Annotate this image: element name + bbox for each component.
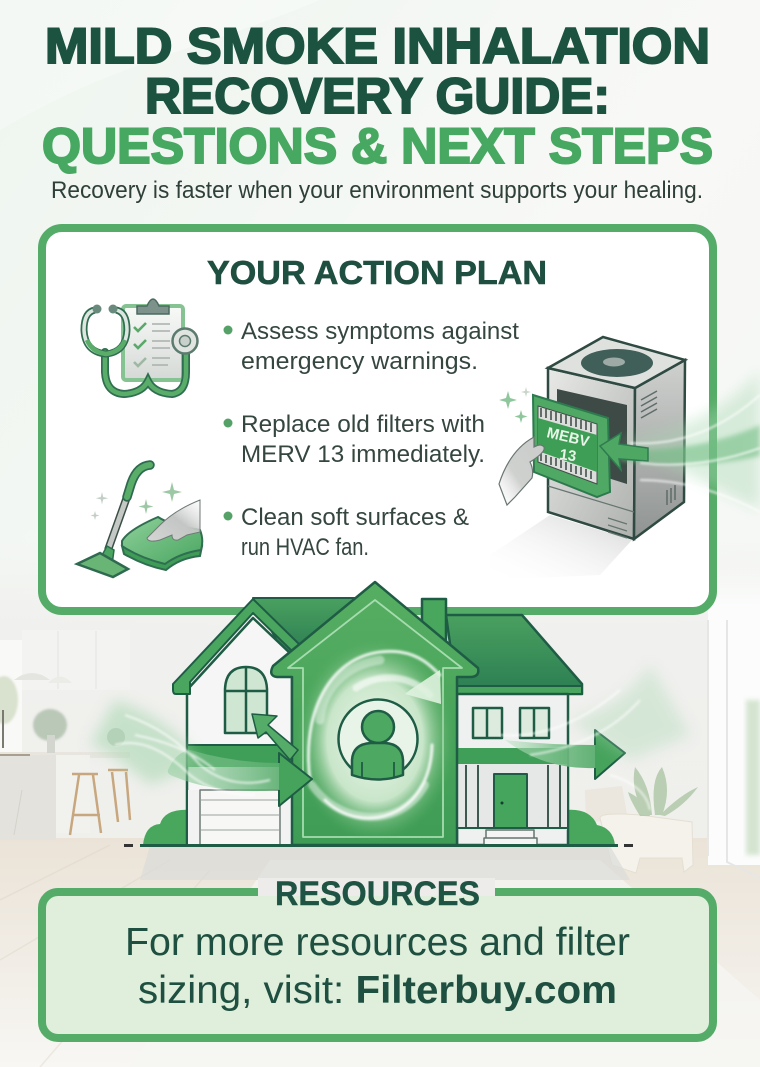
bullet 2	[224, 411, 485, 468]
title line 2: RECOVERY GUIDE:	[145, 68, 610, 124]
bullet 3: Clean soft surfaces &	[241, 504, 469, 531]
resources panel	[42, 875, 713, 1038]
icon: vacuum and cleaning cloth	[77, 465, 202, 577]
resources text: For more resources and filter	[125, 921, 630, 964]
bullet 2: Replace old filters with	[241, 411, 485, 438]
resources heading: RESOURCES	[275, 875, 480, 913]
left wing	[173, 599, 300, 845]
bullet 3: run HVAC fan.	[241, 534, 369, 561]
wind stream into filter	[600, 370, 760, 512]
resources text	[125, 921, 630, 1012]
filter label: MEBV	[545, 424, 591, 451]
garage	[188, 790, 292, 845]
filter panel	[533, 395, 610, 497]
arched window	[225, 667, 267, 733]
bullet 2: MERV 13 immediately.	[241, 441, 485, 468]
window and armchair	[585, 560, 760, 878]
arrow: air leaving	[500, 665, 690, 810]
title	[42, 18, 713, 174]
kitchen	[0, 630, 130, 840]
bushes	[143, 810, 615, 845]
house illustration	[90, 582, 690, 880]
arrow: air entering	[90, 700, 312, 806]
porch	[458, 764, 567, 845]
title line 1: MILD SMOKE INHALATION	[45, 18, 710, 74]
panel: your action plan	[42, 228, 760, 611]
panel heading: YOUR ACTION PLAN	[207, 254, 547, 291]
bullet 1: Assess symptoms against	[241, 318, 519, 345]
back roof	[253, 598, 355, 655]
arrow: air to upstairs window	[252, 714, 298, 760]
air swirl	[308, 651, 440, 818]
resources text: sizing, visit: Filterbuy.com	[138, 969, 617, 1012]
ground shadow	[140, 846, 630, 880]
bullet 3	[224, 504, 469, 561]
hand holding filter	[499, 437, 544, 505]
bullet 1	[224, 318, 519, 375]
subtitle: Recovery is faster when your environment supports your healing.	[51, 177, 703, 204]
bullet 1: emergency warnings.	[241, 348, 478, 375]
chimney	[422, 599, 446, 660]
filter panel: 13	[558, 446, 577, 465]
person icon	[338, 700, 418, 780]
upper windows	[473, 708, 549, 738]
ground line	[124, 844, 633, 847]
icon: stethoscope and clipboard	[84, 299, 198, 394]
right wing	[446, 615, 582, 845]
icon: HVAC unit with MERV filter	[490, 337, 760, 580]
title line 3: QUESTIONS & NEXT STEPS	[42, 118, 713, 174]
central tower	[271, 582, 478, 845]
action list	[224, 318, 519, 561]
